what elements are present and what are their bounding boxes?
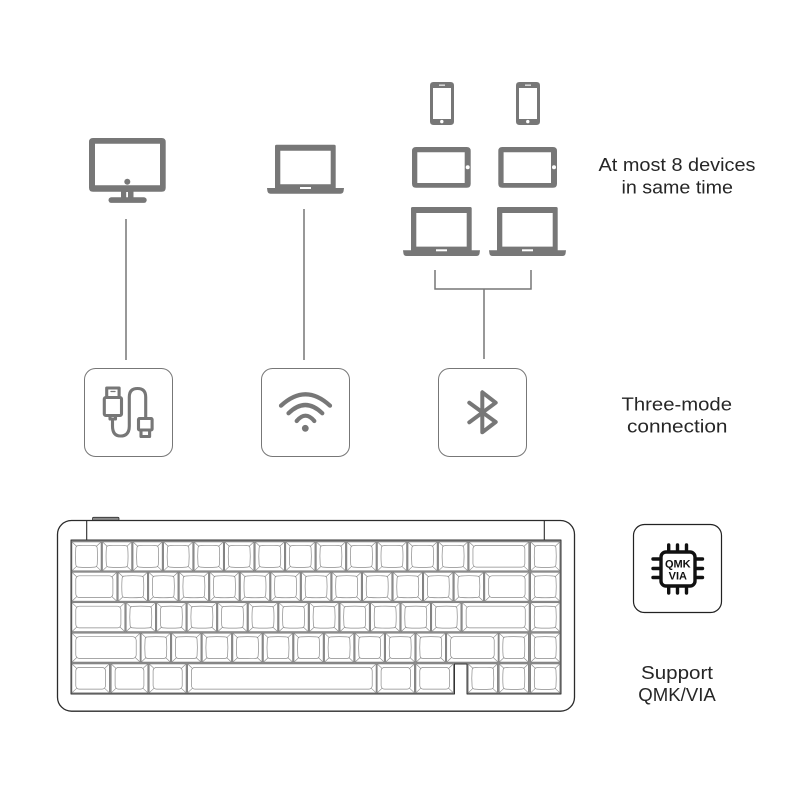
icon: bluetooth [469, 392, 496, 432]
icon: QMK/VIA chip [653, 545, 702, 593]
panel: QMK/VIA support [634, 524, 722, 612]
icon: QMK/VIA chip: QMK [665, 558, 691, 570]
key row 5 [72, 664, 560, 693]
caption: device count: At most 8 devices [598, 155, 756, 175]
icon: tablet 2 [498, 147, 557, 188]
connector line: laptop to wifi [303, 209, 305, 360]
key row 1 [72, 542, 560, 571]
icon: laptop 1 of pair [403, 207, 480, 256]
icon: tablet 1 [412, 147, 471, 188]
icon: wifi [281, 394, 330, 432]
caption: connection modes: connection [627, 416, 728, 436]
icon: QMK/VIA chip: VIA [669, 571, 687, 583]
panel: USB cable mode [84, 368, 172, 456]
icon: desktop monitor [89, 138, 166, 203]
keyboard knob [92, 517, 119, 522]
caption: device count: in same time [622, 178, 733, 198]
caption: connection modes: Three-mode [622, 394, 732, 414]
key row 4 [72, 633, 560, 662]
keyboard case [58, 520, 574, 711]
panel: wireless mode [262, 368, 350, 456]
keyboard plate [71, 540, 561, 694]
caption: firmware support: QMK/VIA [638, 685, 716, 705]
caption: device count [598, 155, 756, 198]
caption: connection modes [622, 394, 732, 436]
icon: phone 2 [516, 82, 540, 125]
icon: phone 1 [430, 82, 454, 125]
icon: laptop 2 of pair [489, 207, 566, 256]
connector bracket: devices to bluetooth [435, 270, 531, 359]
panel: bluetooth mode [438, 368, 526, 456]
icon: USB cable [104, 388, 152, 436]
caption: firmware support: Support [641, 663, 713, 683]
key row 2 [72, 572, 560, 601]
keyboard illustration [58, 517, 574, 711]
icon: laptop [267, 145, 344, 194]
key row 3 [72, 603, 560, 632]
connector line: monitor to USB [125, 219, 127, 360]
caption: firmware support [638, 663, 716, 705]
